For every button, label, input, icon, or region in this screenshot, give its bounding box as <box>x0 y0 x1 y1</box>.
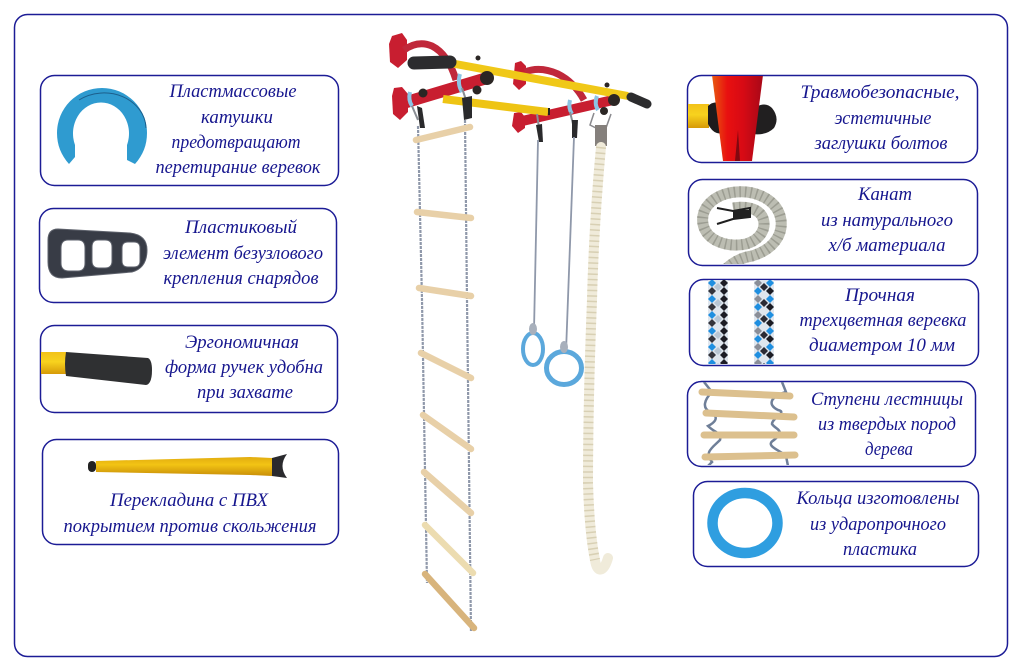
text: rungs: из твердых пород <box>818 415 956 435</box>
text: rings: пластика <box>843 540 917 560</box>
panel: bolt caps <box>687 75 978 162</box>
text: spools: перетирание веревок <box>156 158 321 178</box>
icon: yellow crossbar <box>88 454 287 478</box>
text: handles <box>165 333 323 403</box>
text: handles: Эргономичная <box>185 333 299 353</box>
blue spools on arms <box>409 74 598 114</box>
text: handles: при захвате <box>197 383 293 403</box>
text: bolt caps: Травмобезопасные, <box>800 83 960 103</box>
black grips, caps and bolts <box>414 56 647 115</box>
text: rungs <box>811 390 963 460</box>
text: PVC bar <box>64 491 316 537</box>
icon: red post with black caps <box>687 75 777 161</box>
text: rings: Кольца изготовлены <box>795 489 960 509</box>
icon: coiled rope <box>703 192 781 268</box>
panel: cotton rope <box>688 180 978 268</box>
text: handles: форма ручек удобна <box>165 358 323 378</box>
wall brackets and red arms <box>389 33 613 133</box>
icon: braided cords <box>708 279 774 365</box>
ladder ropes <box>418 120 471 632</box>
text: spools: катушки <box>201 108 273 128</box>
text: spools: предотвращают <box>172 133 300 153</box>
icon: three-hole plastic element <box>48 229 147 278</box>
text: rings: из ударопрочного <box>810 515 946 535</box>
text: knotless element: Пластиковый <box>184 218 298 238</box>
gymnastic ring ropes <box>534 137 574 352</box>
text: bolt caps <box>800 83 960 154</box>
panel: three-colour cord <box>690 279 978 366</box>
icon: blue spool <box>57 88 147 164</box>
gymnastic rings <box>523 333 582 384</box>
thick rope <box>588 147 608 570</box>
panel: wooden rungs <box>688 382 976 466</box>
hanging hardware <box>412 88 578 142</box>
text: cord <box>800 286 966 356</box>
icon: ladder fragment <box>702 382 795 466</box>
text: spools <box>156 82 321 178</box>
text: bolt caps: заглушки болтов <box>813 134 948 154</box>
text: cotton rope: Канат <box>857 185 912 205</box>
panel: rings <box>694 482 978 566</box>
silver rope clamp <box>590 113 611 146</box>
text: bolt caps: эстетичные <box>834 109 932 129</box>
ring knots <box>529 323 568 353</box>
illustration: wall-mounted frame with ladder, rings and rope <box>389 33 647 632</box>
text: PVC bar: Перекладина с ПВХ <box>109 491 269 511</box>
text: cord: диаметром 10 мм <box>809 336 955 356</box>
text: knotless element: элемент безузлового <box>163 244 323 264</box>
text: cotton rope <box>821 185 953 256</box>
text: cotton rope: из натурального <box>821 211 953 231</box>
text: spools: Пластмассовые <box>169 82 296 102</box>
text: PVC bar: покрытием против скольжения <box>64 517 316 537</box>
icon: blue ring <box>712 493 778 553</box>
panel: PVC bar <box>42 440 338 544</box>
icon: black handle <box>41 352 152 385</box>
text: knotless element: крепления снарядов <box>164 269 318 289</box>
text: cord: трехцветная веревка <box>800 311 966 331</box>
text: rungs: дерева <box>865 440 913 460</box>
text: cotton rope: х/б материала <box>827 236 946 256</box>
text: rings <box>795 489 960 560</box>
text: knotless element <box>163 218 323 289</box>
text: cord: Прочная <box>844 286 915 306</box>
text: rungs: Ступени лестницы <box>811 390 963 410</box>
panel: ergonomic handles <box>40 326 338 412</box>
yellow crossbars <box>443 63 628 112</box>
panel: plastic spools <box>40 76 338 186</box>
wooden ladder rungs <box>416 127 474 628</box>
panel: knotless element <box>40 208 336 302</box>
